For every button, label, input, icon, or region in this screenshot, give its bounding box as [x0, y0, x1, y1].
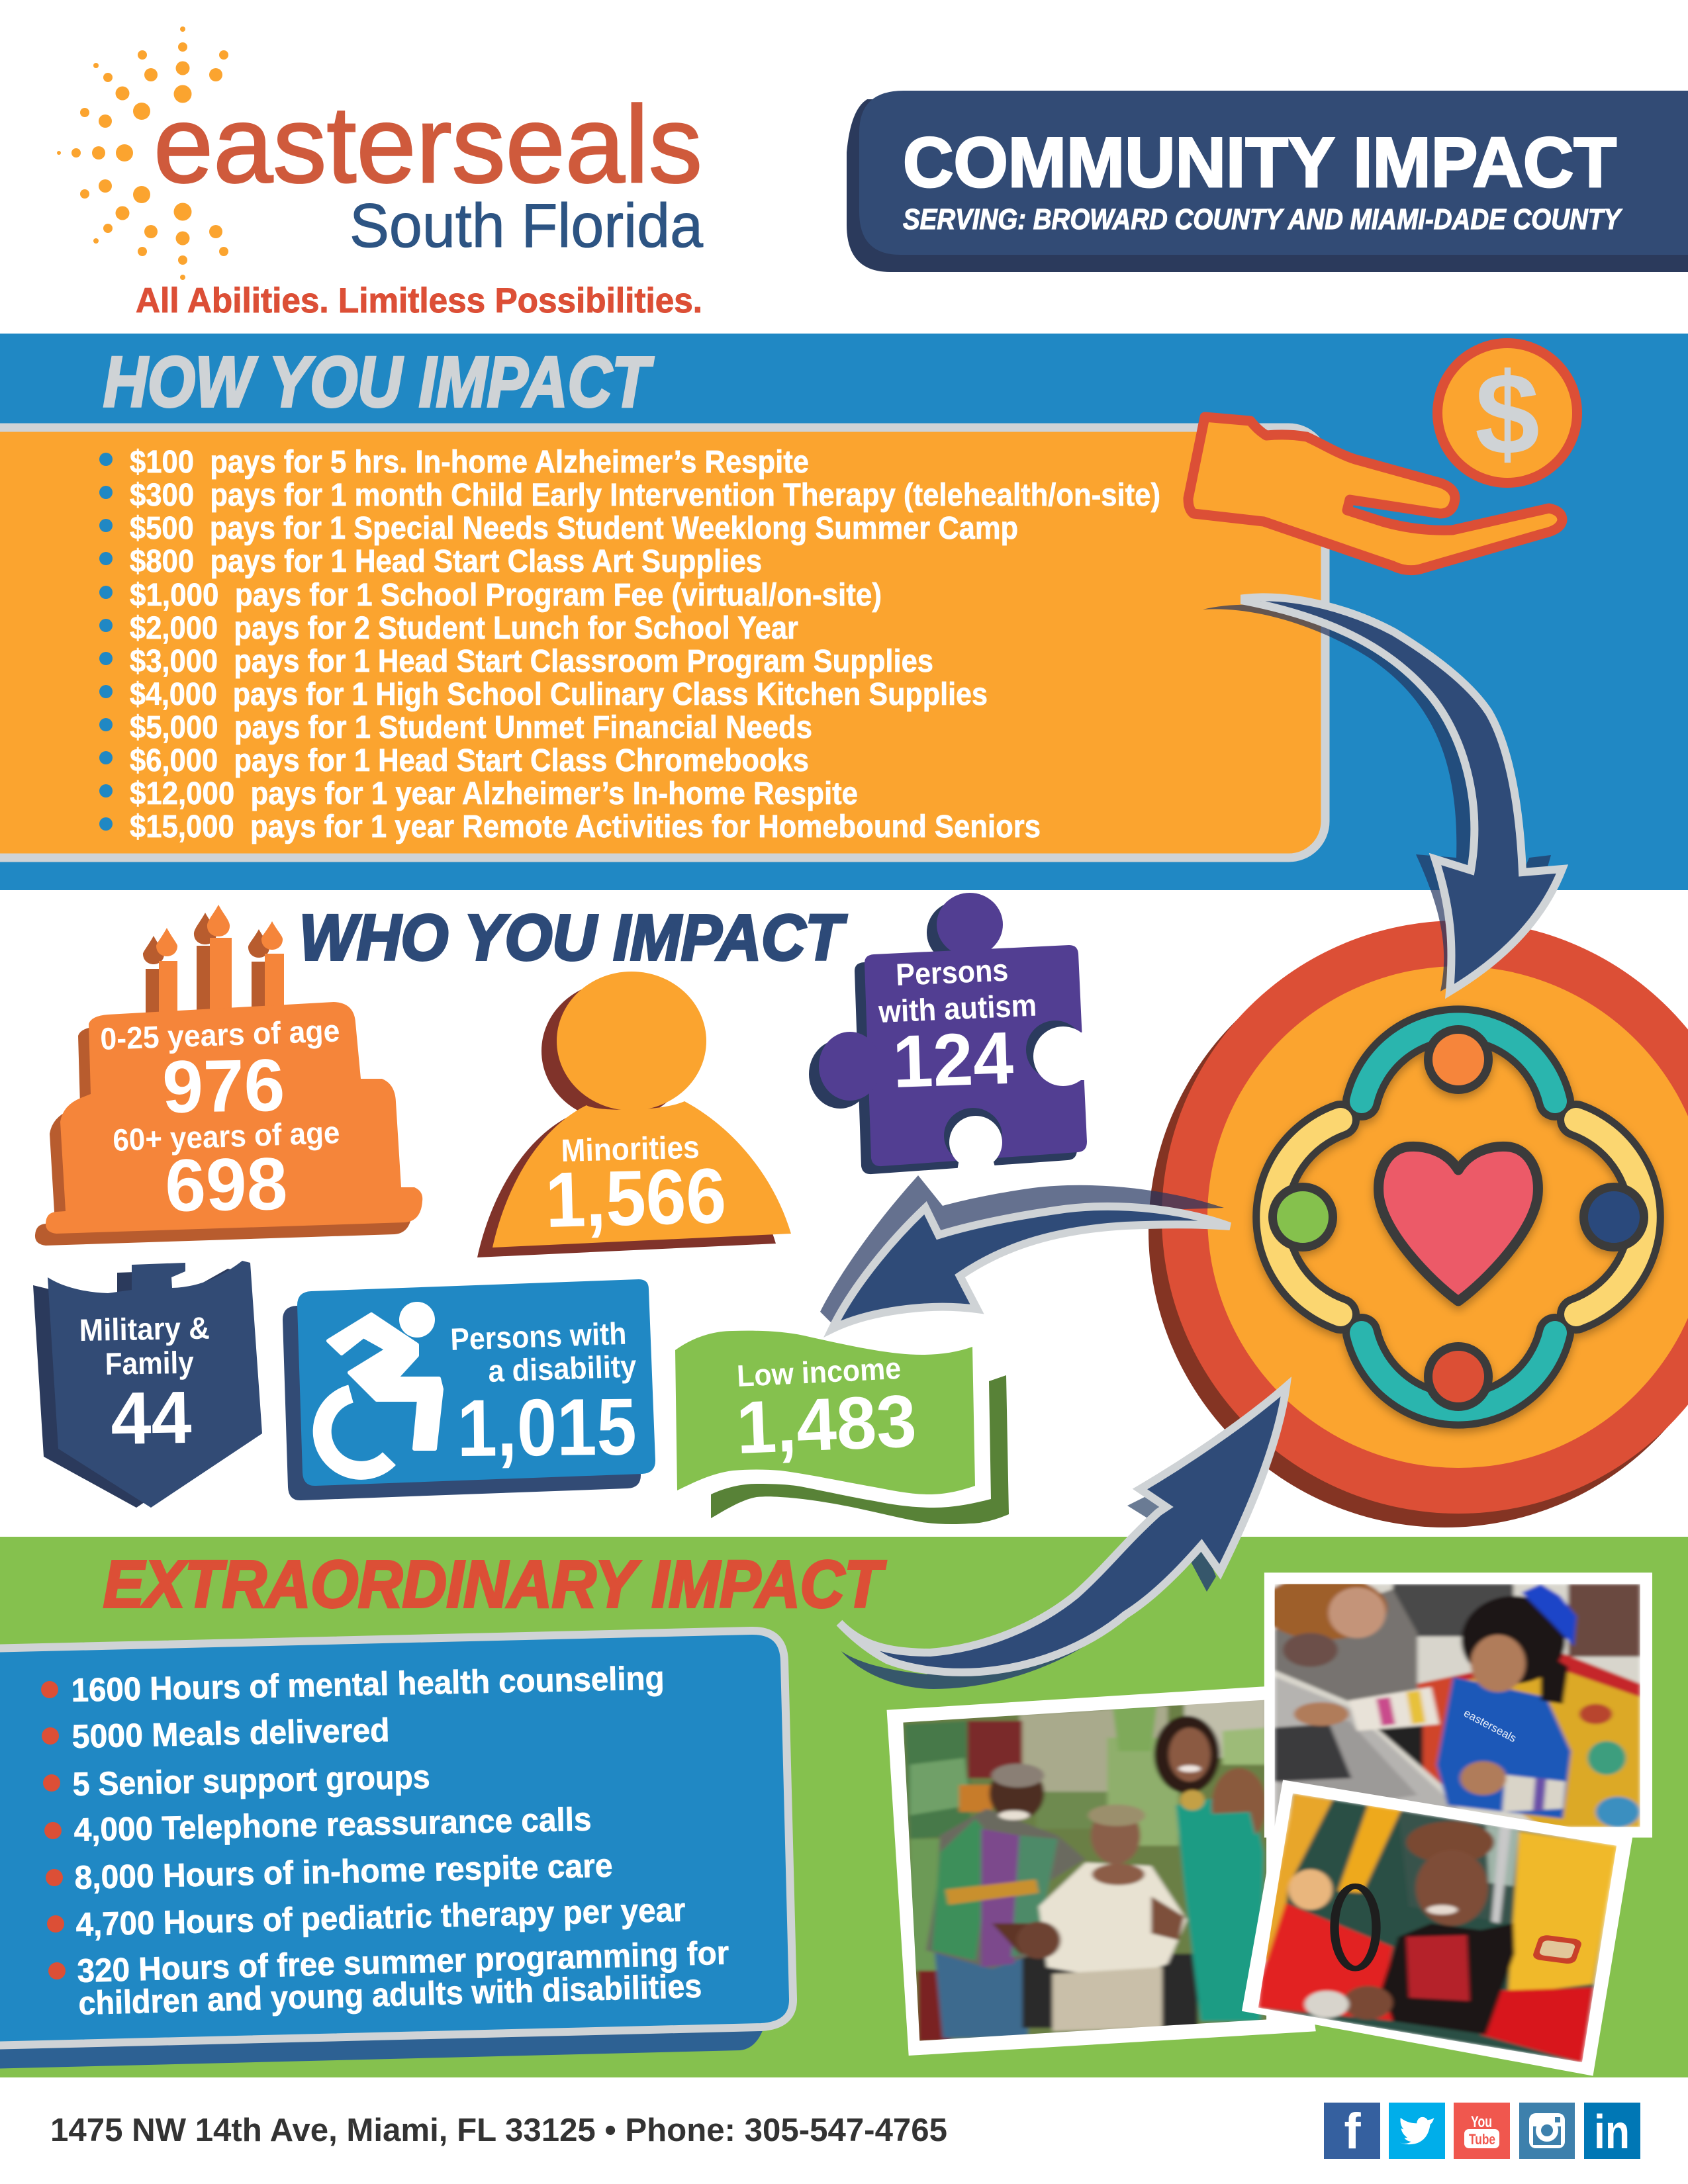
icon: puzzle piece	[809, 893, 1098, 1175]
arrow: impact circle to people	[820, 1175, 1230, 1329]
donation items: $800 pays for 1 Head Start Class Art Supplies	[130, 544, 762, 579]
icon: person	[477, 972, 791, 1257]
label: military and family: Military &	[79, 1310, 210, 1347]
impact items: 1600 Hours of mental health counseling	[71, 1659, 665, 1709]
donation items: $6,000 pays for 1 Head Start Class Chromebooks	[130, 743, 809, 778]
heading: how you impact: HOW YOU IMPACT	[103, 341, 654, 422]
value: 1,015: 1,015	[457, 1382, 637, 1473]
stat: military badge	[33, 1261, 262, 1508]
value: 976: 976	[162, 1044, 285, 1128]
label: 0-25 years: 0-25 years of age	[99, 1013, 340, 1056]
icon: candles	[143, 905, 284, 1022]
donation items: $4,000 pays for 1 High School Culinary Class Kitchen Supplies	[130, 677, 988, 712]
impact items: 4,000 Telephone reassurance calls	[73, 1801, 592, 1848]
donation items: $3,000 pays for 1 Head Start Classroom Program Supplies	[130, 644, 933, 679]
donation items: $12,000 pays for 1 year Alzheimer’s In-home Respite	[130, 776, 858, 811]
icon: shield	[33, 1261, 262, 1508]
photo: child in toy car	[1242, 1780, 1632, 2076]
icon: community ring	[1272, 1024, 1645, 1410]
value: 698: 698	[164, 1142, 288, 1227]
heading: extraordinary impact: EXTRAORDINARY IMPACT	[103, 1547, 886, 1621]
icon: youtube: You	[1471, 2113, 1492, 2131]
icon: coin	[1432, 338, 1582, 488]
card background	[283, 1279, 655, 1500]
icon: twitter	[1389, 2103, 1445, 2159]
heading: who you impact: WHO YOU IMPACT	[299, 901, 847, 974]
icon: hand holding coin	[1188, 338, 1582, 570]
donation items: $2,000 pays for 2 Student Lunch for School Year	[130, 611, 798, 646]
icon: youtube: Tube	[1469, 2131, 1495, 2148]
donation items: $500 pays for 1 Special Needs Student Weeklong Summer Camp	[130, 511, 1018, 546]
icon: youtube	[1454, 2103, 1510, 2159]
label: persons: Persons	[895, 952, 1009, 992]
panel: extraordinary impact list	[0, 1631, 793, 2069]
footer: contact address: 1475 NW 14th Ave, Miami, FL 33125 • Phone: 305-547-4765	[50, 2113, 947, 2148]
label: with autism: with autism	[877, 987, 1037, 1029]
arrow: extraordinary impact to circle	[839, 1387, 1286, 1689]
arrow: donations to impact circle	[1203, 597, 1562, 991]
icon: facebook	[1324, 2103, 1380, 2160]
tagline: All Abilities. Limitless Possibilities.	[136, 281, 702, 320]
impact items: 4,700 Hours of pediatric therapy per year	[75, 1891, 686, 1943]
label: persons with: Persons with	[449, 1316, 627, 1357]
logo: easterseals South Florida	[57, 26, 704, 320]
photo: child and teacher at laptop	[1261, 1572, 1652, 1838]
icon: linkedin: in	[1594, 2106, 1630, 2159]
label: low income: Low income	[736, 1351, 902, 1393]
donation items: $5,000 pays for 1 Student Unmet Financial Needs	[130, 710, 812, 745]
panel: header banner	[847, 91, 1688, 272]
icon: cake	[35, 1002, 422, 1246]
stat: age groups cake	[35, 905, 422, 1246]
icon: heart	[1379, 1146, 1538, 1301]
donation items	[130, 445, 1160, 844]
icon: coin: $	[1475, 349, 1540, 479]
photo label: shirt logo: easterseals	[1462, 1707, 1519, 1745]
icon: sunburst dots	[57, 26, 228, 280]
impact items: 8,000 Hours of in-home respite care	[74, 1847, 613, 1896]
label: minorities: Minorities	[561, 1130, 700, 1169]
donation items: $1,000 pays for 1 School Program Fee (virtual/on-site)	[130, 578, 882, 613]
bullets	[41, 1681, 66, 1979]
value: 1,483: 1,483	[735, 1379, 918, 1469]
impact items: 5000 Meals delivered	[71, 1711, 390, 1755]
title: COMMUNITY IMPACT	[903, 122, 1617, 202]
icon: hand	[1188, 417, 1562, 570]
bullets	[99, 453, 113, 831]
impact items: children and young adults with disabilities	[78, 1968, 702, 2022]
label: family: Family	[105, 1345, 194, 1381]
photo: family with man in wheelchair	[882, 1686, 1316, 2056]
label: 60+ years: 60+ years of age	[112, 1115, 340, 1158]
icon: banner	[675, 1331, 1009, 1524]
impact items: 5 Senior support groups	[72, 1758, 430, 1803]
value: 124: 124	[891, 1017, 1015, 1103]
stat: persons with a disability	[283, 1279, 655, 1500]
panel: donation list	[0, 428, 1325, 858]
donation items: $300 pays for 1 month Child Early Intervention Therapy (telehealth/on-site)	[130, 478, 1160, 513]
icon: accessible wheelchair	[322, 1302, 442, 1471]
icon: target circle with people and heart	[1149, 921, 1688, 1527]
impact items: 320 Hours of free summer programming for	[77, 1934, 729, 1989]
icon: instagram	[1519, 2103, 1575, 2159]
donation items: $15,000 pays for 1 year Remote Activities for Homebound Seniors	[130, 809, 1041, 844]
impact items	[71, 1659, 729, 2022]
logo sub-wordmark: South Florida	[350, 191, 704, 260]
value: 44: 44	[110, 1376, 192, 1460]
logo wordmark: easterseals	[154, 83, 702, 205]
stat: low income banner	[675, 1331, 1009, 1524]
stat: autism puzzle piece	[809, 893, 1098, 1175]
stat: minorities person	[477, 972, 791, 1257]
label: a disability: a disability	[487, 1348, 637, 1388]
icon: facebook: f	[1344, 2103, 1361, 2160]
value: 1,566: 1,566	[544, 1152, 727, 1244]
donation items: $100 pays for 5 hrs. In-home Alzheimer’s Respite	[130, 445, 809, 480]
